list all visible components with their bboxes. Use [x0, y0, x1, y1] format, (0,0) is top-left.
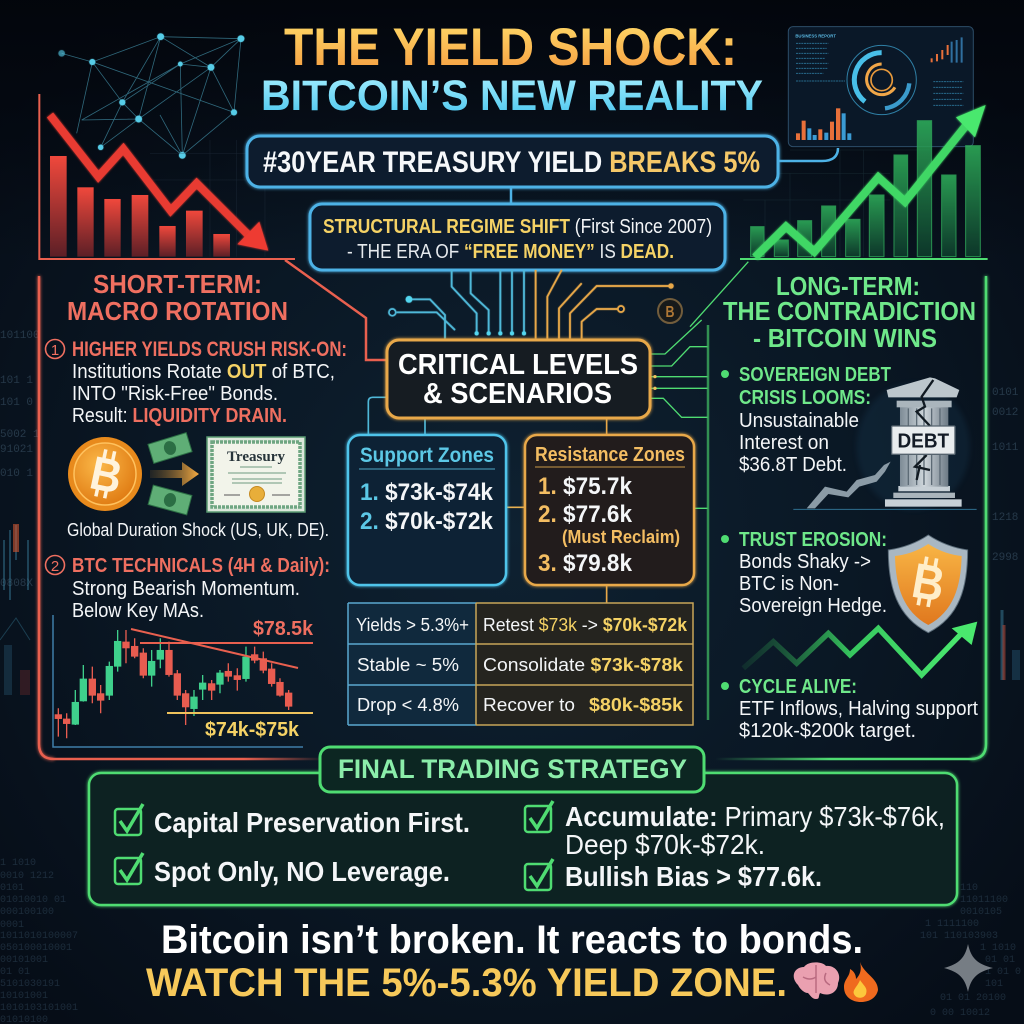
- resistance zones card: Resistance Zones: [535, 444, 685, 466]
- point: trust erosion: Bonds Shaky ->: [739, 551, 871, 573]
- critical levels box: CRITICAL LEVELS: [398, 349, 638, 381]
- caption: Global Duration Shock (US, UK, DE).: [67, 520, 329, 540]
- candlestick chart: [53, 615, 314, 747]
- background data strips: 00101001: [0, 955, 48, 966]
- point 2 text: 2: [51, 558, 59, 575]
- point 1 text: Institutions Rotate OUT of BTC,: [72, 361, 335, 383]
- background data strips: 10101001: [0, 991, 48, 1002]
- chart: falling red bars and arrow: [39, 94, 295, 259]
- circuit lines: [389, 270, 674, 338]
- background data strips: 1 1010: [0, 858, 36, 869]
- background data strips: [0, 330, 1021, 1024]
- icon: green zigzag arrow: [743, 622, 977, 675]
- headline box: [247, 136, 838, 187]
- support zones card: [348, 435, 506, 585]
- final trading strategy panel: [89, 747, 957, 905]
- heading: - BITCOIN WINS: [753, 323, 937, 353]
- item: accumulate: Accumulate: Primary $73k-$76k,: [565, 801, 945, 832]
- dashboard decoration: [788, 27, 973, 147]
- background data strips: 0012: [992, 407, 1018, 419]
- heading: MACRO ROTATION: [67, 296, 288, 326]
- resistance zones card: 2. $77.6k: [538, 501, 633, 528]
- background data strips: 01 01: [0, 967, 30, 978]
- title: BITCOIN’S NEW REALITY: [261, 72, 763, 120]
- resistance zones card: (Must Reclaim): [562, 527, 680, 547]
- support zones card: Support Zones: [360, 444, 494, 467]
- point: cycle alive: $120k-$200k target.: [739, 720, 916, 742]
- background data strips: 11011100: [960, 895, 1008, 906]
- closing statement: WATCH THE 5%-5.3% YIELD ZONE.: [146, 961, 787, 1005]
- strategy heading: FINAL TRADING STRATEGY: [338, 754, 687, 784]
- title: [261, 18, 763, 120]
- icon: flame: [844, 962, 878, 1002]
- icon: bitcoin coin: [68, 437, 142, 511]
- background data strips: 01 01: [985, 955, 1015, 966]
- strategy heading: [320, 747, 704, 792]
- background data strips: 010 1: [0, 468, 33, 480]
- point: trust erosion: BTC is Non-: [739, 573, 839, 595]
- regime shift box: STRUCTURAL REGIME SHIFT (First Since 2007): [323, 216, 712, 238]
- connector: headline to regime box: [510, 187, 512, 204]
- candlestick chart: $74k-$75k: [205, 719, 300, 741]
- background data strips: 0101: [992, 387, 1019, 399]
- background data strips: 5101030191: [0, 979, 60, 990]
- regime shift box: - THE ERA OF “FREE MONEY” IS DEAD.: [347, 241, 674, 263]
- background data strips: 01 01 20100: [940, 993, 1006, 1004]
- background data strips: 1 01 0: [985, 967, 1021, 978]
- background data strips: 1010103101001: [0, 1003, 78, 1014]
- support zones card: 2. $70k-$72k: [360, 508, 494, 535]
- point 1 text: HIGHER YIELDS CRUSH RISK-ON:: [72, 338, 347, 361]
- heading: LONG-TERM:: [776, 271, 920, 301]
- icon: bitcoin shield: B: [908, 553, 949, 613]
- candlestick chart: $78.5k: [253, 618, 314, 640]
- right panel: long-term: [708, 271, 986, 759]
- background data strips: 0010105: [960, 907, 1002, 918]
- background data strips: 1011010100007: [0, 931, 78, 942]
- point 1 text: Result: LIQUIDITY DRAIN.: [72, 405, 287, 427]
- scenario table: Stable ~ 5%: [357, 655, 459, 675]
- panel frame: [39, 276, 325, 759]
- background data strips: 0808X: [0, 578, 33, 590]
- point: sovereign debt: Unsustainable: [739, 410, 859, 432]
- heading: [723, 271, 976, 353]
- point: trust erosion: TRUST EROSION:: [739, 529, 887, 551]
- scenario table: [348, 603, 693, 725]
- item: capital preservation: Capital Preservation First.: [154, 807, 470, 838]
- heading: THE CONTRADICTION: [723, 296, 976, 326]
- connector to critical levels: [285, 260, 387, 360]
- point 1 text: [46, 338, 347, 427]
- scenario table: Retest $73k -> $70k-$72k: [483, 615, 688, 635]
- background data strips: 01010010 01: [0, 895, 66, 906]
- scenario table: Drop < 4.8%: [357, 695, 459, 715]
- point: cycle alive: [721, 676, 978, 742]
- scenario table: Recover to: [483, 695, 575, 715]
- item: spot only: Spot Only, NO Leverage.: [154, 856, 450, 887]
- background data strips: 5002 1: [0, 429, 40, 441]
- point 2 text: [46, 555, 330, 622]
- icon: bitcoin shield: [888, 535, 968, 633]
- background data strips: 101100: [0, 330, 40, 342]
- point 2 text: Strong Bearish Momentum.: [72, 578, 300, 600]
- background data strips: 101 1: [0, 375, 33, 387]
- scenario table: $80k-$85k: [589, 695, 684, 715]
- icon: small bitcoin node: [658, 299, 682, 323]
- dashboard decoration: BUSINESS REPORT: [795, 33, 836, 38]
- point: cycle alive: CYCLE ALIVE:: [739, 676, 857, 698]
- background data strips: 110: [960, 883, 978, 894]
- point: trust erosion: Sovereign Hedge.: [739, 595, 887, 617]
- scenario table: Yields > 5.3%+: [356, 615, 469, 635]
- background data strips: 0010 1212: [0, 871, 54, 882]
- point 2 text: Below Key MAs.: [72, 600, 204, 622]
- icon: bitcoin coin: B: [86, 445, 127, 504]
- point 1 text: INTO "Risk-Free" Bonds.: [72, 383, 278, 405]
- icon: treasury certificate: [207, 437, 305, 512]
- icon: money to bond arrow: [148, 433, 199, 515]
- background data strips: 2998: [992, 552, 1018, 564]
- background data strips: 101: [985, 979, 1003, 990]
- point: sovereign debt: $36.8T Debt.: [739, 454, 847, 476]
- support zones card: 1. $73k-$74k: [360, 479, 494, 506]
- point: sovereign debt: [721, 364, 891, 476]
- scenario table: Consolidate $73k-$78k: [483, 655, 684, 675]
- icon: debt pillar: DEBT: [897, 430, 949, 452]
- background data strips: 1011: [992, 442, 1019, 454]
- headline box: #30YEAR TREASURY YIELD BREAKS 5%: [263, 146, 760, 179]
- background data strips: 000100100: [0, 907, 54, 918]
- resistance zones card: 3. $79.8k: [538, 550, 633, 577]
- point: sovereign debt: Interest on: [739, 432, 829, 454]
- icon: small bitcoin node: B: [666, 304, 674, 321]
- icon: debt pillar: [793, 377, 977, 510]
- point: trust erosion: [721, 529, 887, 617]
- heading: SHORT-TERM:: [93, 269, 262, 299]
- resistance zones card: 1. $75.7k: [538, 473, 633, 500]
- resistance zones card: [525, 435, 694, 585]
- center connectors: [368, 320, 708, 603]
- icon: brain: [794, 962, 839, 999]
- background data strips: 91021: [0, 444, 33, 456]
- point 2 text: BTC TECHNICALS (4H & Daily):: [72, 555, 330, 577]
- critical levels box: [387, 340, 650, 418]
- icon: treasury certificate: Treasury: [227, 449, 285, 465]
- chart: rising green bars and arrow: [690, 105, 988, 327]
- panel frame: [708, 276, 986, 759]
- background data strips: 101 110103903: [920, 931, 998, 942]
- background data strips: 0 00 10012: [930, 1008, 990, 1019]
- background data strips: 101 0: [0, 397, 33, 409]
- regime shift box: [310, 204, 725, 270]
- point: cycle alive: ETF Inflows, Halving support: [739, 698, 978, 720]
- title: THE YIELD SHOCK:: [284, 18, 737, 77]
- icon: sparkle: [944, 944, 993, 992]
- left panel: short-term macro rotation: [39, 260, 387, 759]
- background data strips: 0001: [0, 920, 24, 931]
- background data strips: 1 1111100: [925, 919, 979, 930]
- item: bullish bias: Bullish Bias > $77.6k.: [565, 861, 822, 892]
- closing statement: Bitcoin isn’t broken. It reacts to bonds.: [161, 918, 863, 962]
- heading: [67, 269, 288, 326]
- background data strips: 0101: [0, 883, 24, 894]
- strategy frame: [89, 773, 957, 905]
- closing statement: [146, 918, 863, 1005]
- background data strips: 050100010001: [0, 943, 72, 954]
- background data strips: 1 1010: [980, 943, 1016, 954]
- item: accumulate: [525, 801, 945, 860]
- network graph decoration: [58, 33, 244, 159]
- point: sovereign debt: CRISIS LOOMS:: [739, 387, 871, 409]
- point 1 text: 1: [51, 342, 59, 359]
- item: accumulate: Deep $70k-$72k.: [565, 829, 765, 860]
- point: sovereign debt: SOVEREIGN DEBT: [739, 364, 891, 386]
- critical levels box: & SCENARIOS: [423, 378, 612, 410]
- background data strips: 1218: [992, 512, 1018, 524]
